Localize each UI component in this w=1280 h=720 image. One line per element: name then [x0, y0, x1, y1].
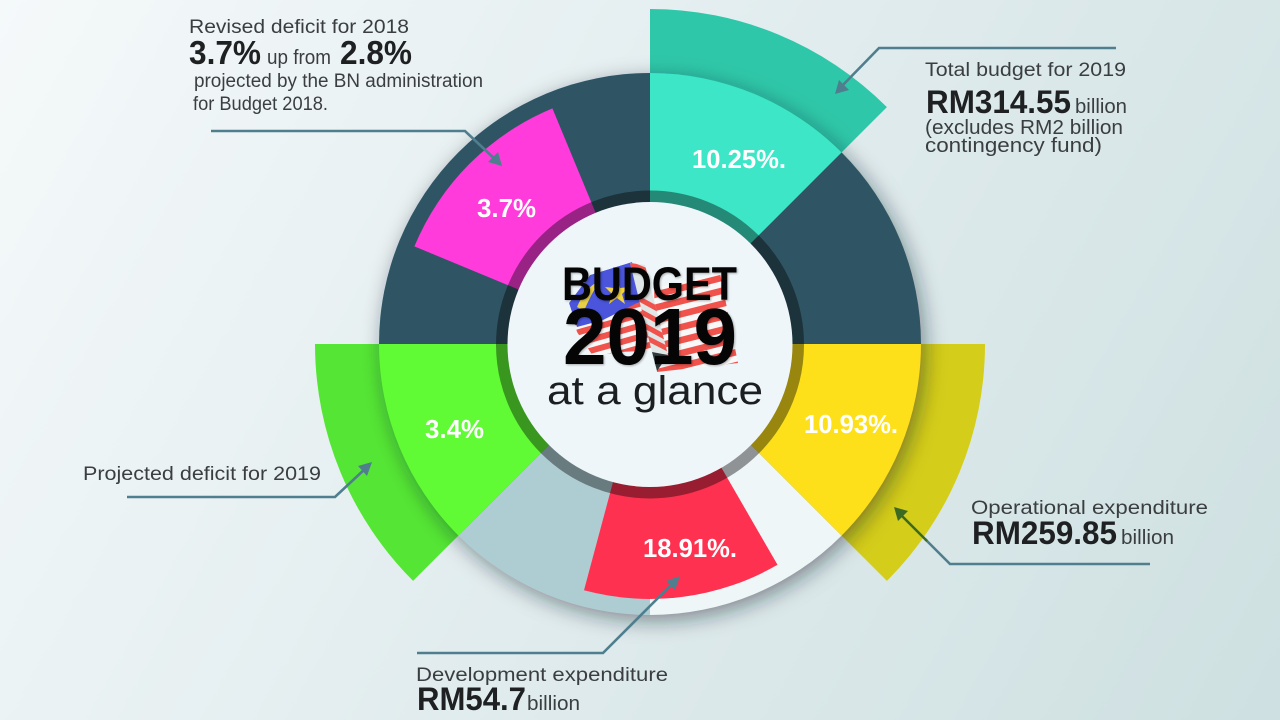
- callout: revised deficit: projected by the BN administration: [194, 71, 483, 92]
- title shadow: 2019: [564, 293, 738, 382]
- callout: revised deficit: 2.8%: [340, 34, 412, 71]
- ring segment: red: [584, 344, 778, 599]
- flag left panel: [569, 262, 652, 355]
- ring segment: green: [379, 344, 650, 536]
- callout: revised deficit: Revised deficit for 2018: [189, 17, 409, 38]
- ring segment: dark upper left: [379, 73, 650, 344]
- ring segment: pale white lower right: [650, 344, 842, 615]
- arrow: projected deficit: [127, 462, 372, 497]
- flag right panel: [654, 274, 738, 372]
- callout: revised deficit: [189, 17, 483, 115]
- ring segment: magenta: [414, 108, 650, 344]
- callout: development expenditure: RM54.7: [417, 681, 526, 717]
- callout: revised deficit: 3.7%: [189, 34, 261, 71]
- outer sector: total budget: [650, 9, 887, 344]
- outer sector: operational expenditure: [650, 344, 985, 581]
- callout: operational expenditure: Operational expenditure: [971, 498, 1208, 519]
- callout: operational expenditure: billion: [1121, 527, 1174, 549]
- title shadow: BUDGET: [563, 258, 738, 311]
- percentage: total budget: 10.25%.: [692, 144, 786, 174]
- ring segment: dark right: [650, 152, 921, 344]
- callout: total budget: RM314.55: [926, 84, 1071, 120]
- percentage: projected deficit: 3.4%: [425, 414, 484, 444]
- centre disc: [508, 202, 792, 487]
- callout: operational expenditure: [971, 498, 1208, 551]
- callout: total budget: [925, 60, 1127, 157]
- callout: total budget: billion: [1075, 96, 1127, 118]
- percentage: development expenditure: 18.91%.: [643, 533, 737, 563]
- flag canton: [569, 262, 647, 327]
- flag crescent: [577, 284, 594, 309]
- flag star: [605, 285, 625, 304]
- callout: operational expenditure: RM259.85: [972, 515, 1117, 551]
- title: [547, 257, 763, 413]
- callout: revised deficit: for Budget 2018.: [193, 94, 328, 115]
- title year: 2019: 2019: [563, 292, 737, 381]
- callout: total budget: Total budget for 2019: [925, 60, 1126, 81]
- flag fold: [630, 263, 668, 355]
- ring segment: pale blue lower left: [458, 344, 650, 615]
- title word: BUDGET: BUDGET: [562, 257, 737, 310]
- inner translucent ring: [502, 196, 798, 492]
- outer sector: projected deficit: [315, 344, 650, 581]
- callout: projected deficit: Projected deficit for 2019: [83, 464, 321, 485]
- callout: total budget: (excludes RM2 billion: [925, 117, 1123, 139]
- callout: development expenditure: billion: [527, 693, 580, 715]
- callout: revised deficit: up from: [267, 47, 331, 69]
- callout: total budget: contingency fund): [925, 135, 1102, 157]
- arrow: development expenditure: [417, 576, 680, 653]
- ring segment: yellow: [650, 344, 921, 536]
- drop shadow of main ring: [384, 80, 924, 620]
- ring segment: teal: [650, 73, 842, 344]
- arrow: total budget: [835, 48, 1116, 94]
- percentage: operational expenditure: 10.93%.: [804, 409, 898, 439]
- title tagline: at a glance: [547, 369, 763, 413]
- flag dark underside: [652, 352, 668, 371]
- arrow: revised deficit: [211, 131, 502, 166]
- callout: development expenditure: [416, 665, 668, 717]
- percentage: revised deficit: 3.7%: [477, 193, 536, 223]
- main ring: [379, 73, 921, 615]
- callout: development expenditure: Development expenditure: [416, 665, 668, 686]
- icon: Malaysian flag: [569, 262, 738, 372]
- arrow: operational expenditure: [894, 507, 1150, 564]
